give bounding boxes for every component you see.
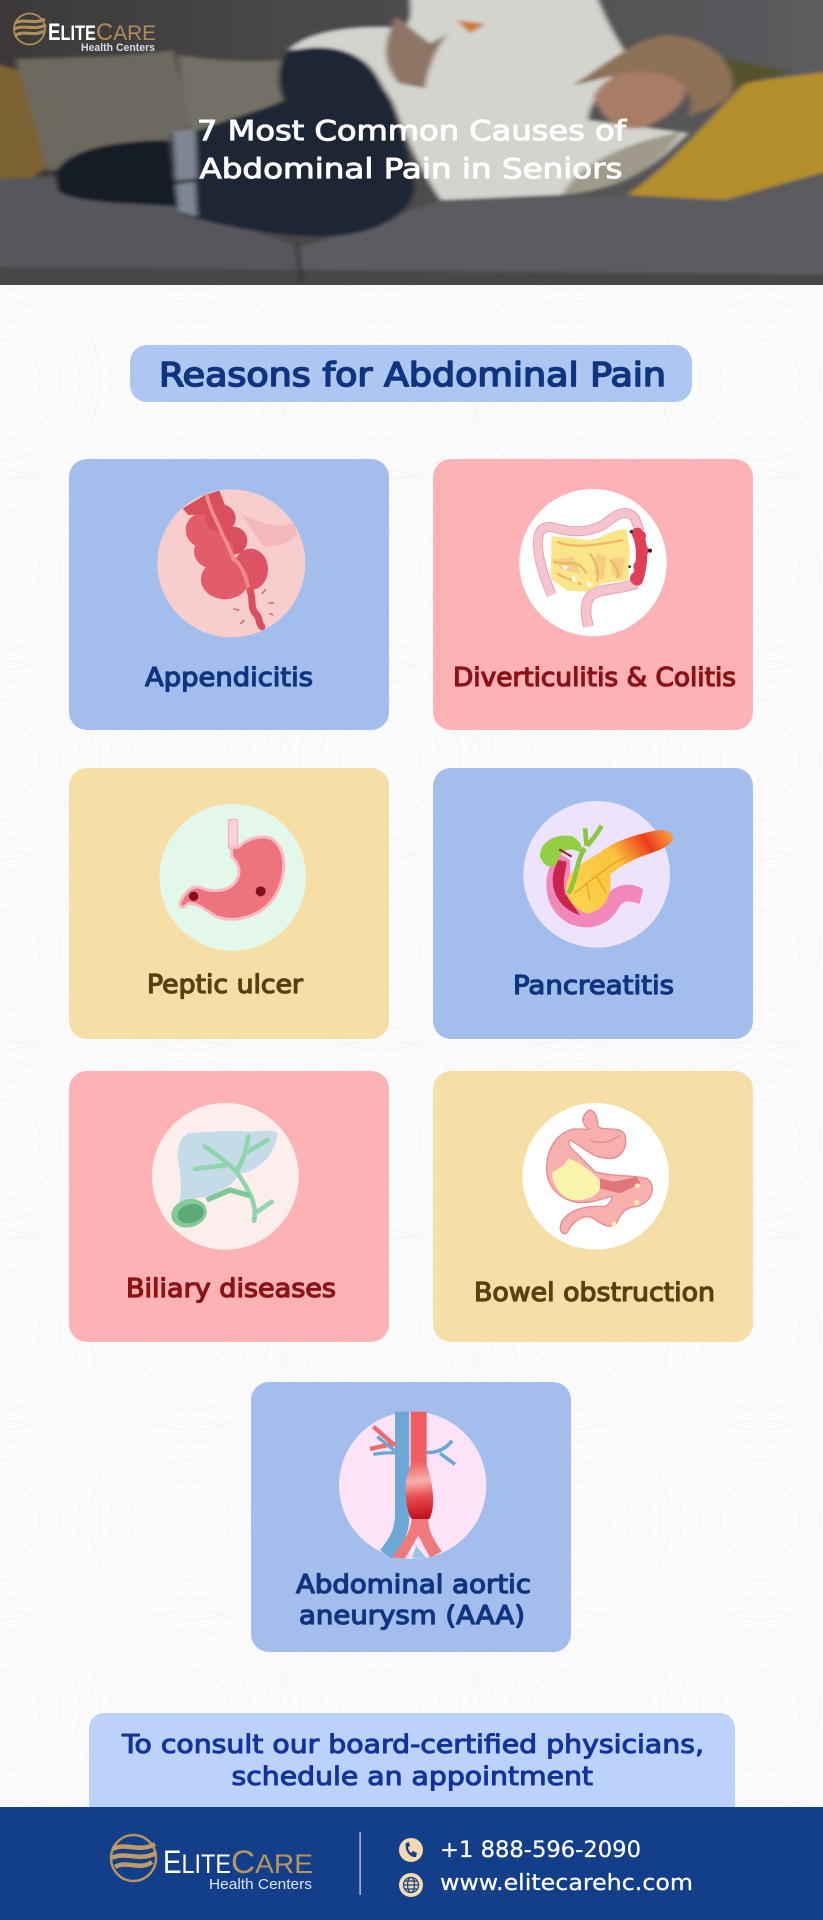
icon: stomach	[159, 804, 306, 951]
icon: globe	[399, 1873, 423, 1897]
title	[197, 114, 627, 185]
card: biliary diseases	[69, 1071, 389, 1342]
icon: pancreas	[523, 801, 673, 948]
card: diverticulitis and colitis	[433, 459, 753, 730]
icon: aorta	[339, 1412, 486, 1559]
label: Diverticulitis & Colitis	[453, 663, 736, 693]
heading pill	[130, 345, 692, 402]
label: Appendicitis	[145, 663, 313, 693]
header logo: Health Centers	[81, 42, 155, 54]
footer logo: CARE	[231, 1844, 313, 1880]
title: 7 Most Common Causes of	[197, 114, 627, 147]
label: Pancreatitis	[513, 971, 674, 1001]
icon: phone	[399, 1838, 423, 1862]
footer logo: Health Centers	[209, 1876, 312, 1893]
label: Bowel obstruction	[474, 1278, 715, 1308]
card: abdominal aortic aneurysm: aneurysm (AAA)	[299, 1601, 525, 1631]
page background	[0, 285, 823, 1807]
call to action: schedule an appointment	[232, 1762, 593, 1792]
footer logo	[111, 1835, 313, 1893]
card: appendicitis	[69, 459, 389, 730]
header logo: CARE	[96, 19, 156, 46]
footer logo: ELITE	[163, 1844, 231, 1880]
icon: appendix	[157, 489, 305, 637]
card: peptic ulcer	[69, 768, 389, 1039]
label: Biliary diseases	[126, 1274, 336, 1304]
card: abdominal aortic aneurysm	[251, 1382, 571, 1652]
header photo: woman lying on sofa	[0, 0, 823, 307]
icon: bowel	[522, 1103, 669, 1250]
title: Abdominal Pain in Seniors	[200, 152, 622, 185]
website: www.elitecarehc.com	[440, 1871, 693, 1896]
card: pancreatitis	[433, 768, 753, 1039]
label: Peptic ulcer	[147, 970, 303, 1000]
card: bowel obstruction	[433, 1071, 753, 1342]
label: Abdominal aortic	[296, 1570, 531, 1600]
call to action	[89, 1713, 735, 1808]
phone number: +1 888-596-2090	[440, 1838, 641, 1863]
icon: colon	[519, 489, 667, 636]
call to action: To consult our board-certified physicians,	[121, 1730, 704, 1760]
icon: liver and gallbladder	[152, 1103, 299, 1250]
header logo: ELITE	[48, 19, 96, 46]
footer	[0, 1807, 823, 1920]
header logo	[14, 14, 156, 54]
heading pill: Reasons for Abdominal Pain	[159, 355, 666, 394]
